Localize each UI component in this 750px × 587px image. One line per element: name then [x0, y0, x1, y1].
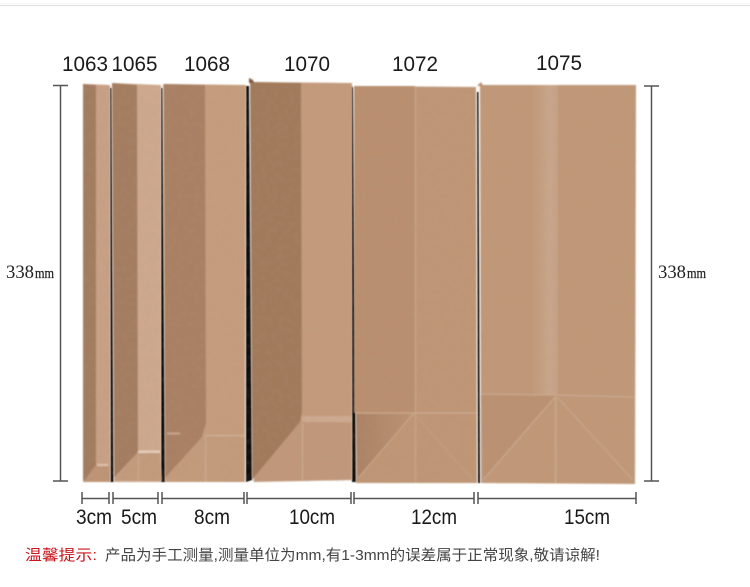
width labels: [76, 506, 610, 529]
model number labels: 1072: [392, 53, 438, 76]
right height dimension: [644, 86, 706, 481]
black gaps between bags: [110, 86, 480, 483]
left height dimension: [6, 85, 68, 481]
bag 1072: [354, 86, 477, 483]
right height dimension: mm: [687, 266, 706, 282]
bag 1070: [249, 78, 352, 482]
bag 1065: [112, 83, 162, 482]
model number labels: 1075: [536, 52, 582, 75]
width labels: 3cm: [76, 506, 112, 529]
left height dimension: 338: [6, 263, 34, 283]
note text: 产品为手工测量,测量单位为mm,有1-3mm的误差属于正常现象,敬请谅解!: [105, 547, 600, 564]
bag 1075: [477, 82, 636, 484]
bag 1063: [83, 84, 110, 482]
width dimension lines: [82, 492, 636, 504]
model number labels: 1070: [284, 53, 330, 76]
model number labels: 1068: [184, 53, 230, 76]
left height dimension: mm: [35, 266, 54, 282]
model number labels: 1065: [112, 53, 158, 76]
note text: 温馨提示:: [25, 547, 97, 564]
width labels: 5cm: [121, 506, 157, 529]
model number labels: 1063: [62, 53, 108, 76]
width labels: 10cm: [289, 506, 335, 529]
width labels: 12cm: [411, 506, 457, 529]
model number labels: [62, 52, 582, 76]
right height dimension: 338: [658, 263, 686, 283]
width labels: 15cm: [564, 506, 610, 529]
width labels: 8cm: [194, 506, 230, 529]
paper grain: [110, 86, 480, 482]
bag 1068: [163, 84, 246, 482]
